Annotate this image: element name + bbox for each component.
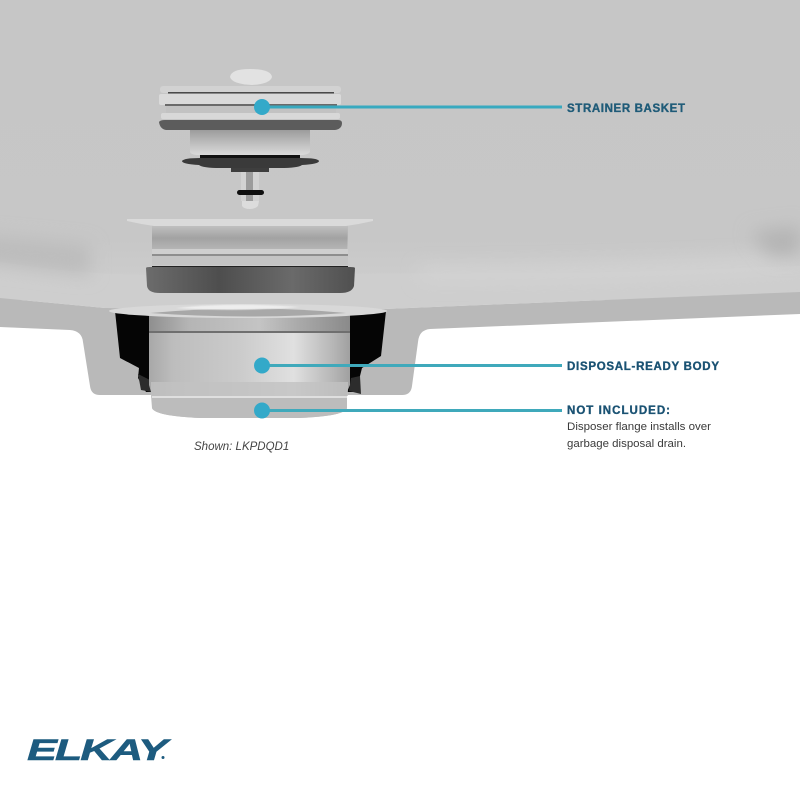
- cup: [190, 130, 310, 155]
- flange part: [127, 219, 373, 293]
- sink cut section: [0, 292, 800, 395]
- label: not included: Disposer flange installs over: [567, 421, 711, 433]
- seal: [200, 155, 300, 159]
- knob: [230, 69, 272, 85]
- black gasket: [115, 311, 386, 394]
- strainer basket part: [159, 69, 342, 209]
- label: not included: garbage disposal drain.: [567, 438, 686, 450]
- leader: not included: [254, 402, 562, 418]
- label: disposal-ready body: DISPOSAL-READY BODY: [567, 361, 719, 373]
- stem: [241, 172, 259, 201]
- sink wall background: [0, 0, 800, 300]
- caption: Shown: LKPDQD1: [194, 441, 289, 453]
- label: not included: [567, 405, 711, 450]
- top plate: [160, 86, 341, 93]
- drain body: [149, 312, 350, 418]
- sink deck: [0, 226, 800, 309]
- drain top rim: [109, 304, 387, 318]
- label: strainer basket: STRAINER BASKET: [567, 103, 685, 115]
- leader: disposal-ready body: [254, 358, 562, 374]
- label: not included: NOT INCLUDED:: [567, 405, 670, 417]
- leader: strainer basket: [254, 99, 562, 115]
- logo: Elkay: ELKAY: [27, 733, 172, 767]
